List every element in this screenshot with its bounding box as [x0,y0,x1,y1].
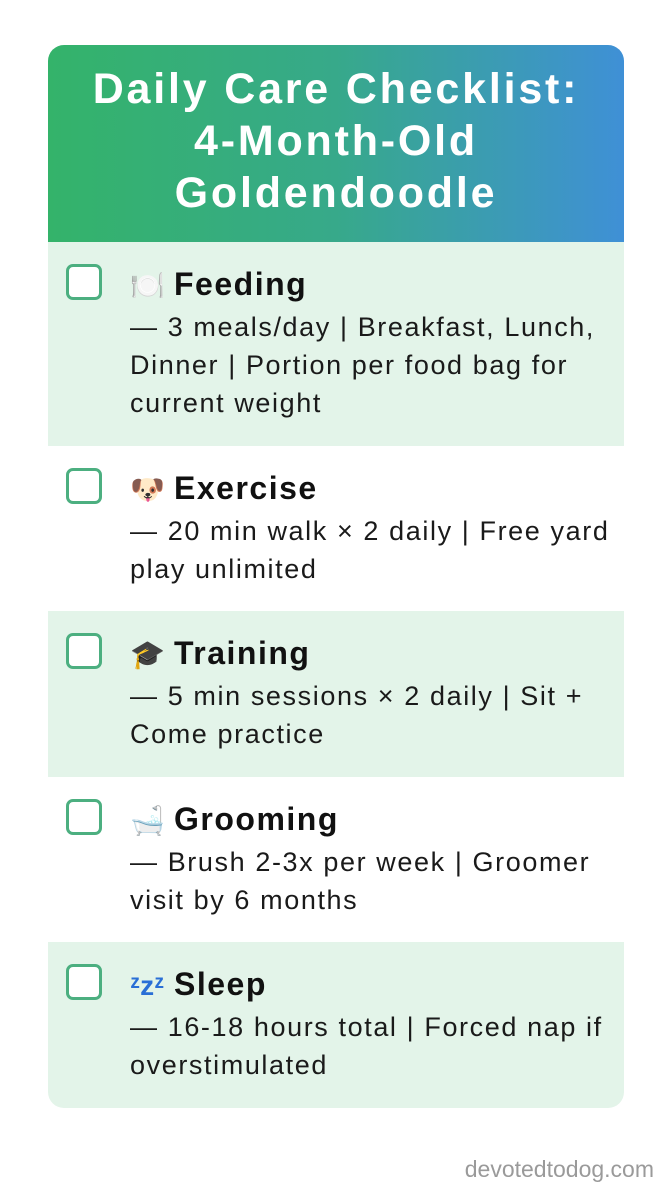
heading: feeding: 🍽️ [130,270,165,301]
heading: grooming: 🛁 [130,805,165,836]
heading: grooming: Grooming [174,801,339,837]
row: exercise [48,446,624,611]
row: sleep [48,942,624,1108]
heading: exercise: Exercise [174,470,318,506]
text: training details: — 5 min sessions × 2 daily | Sit + Come practice [130,681,583,749]
title header: Goldendoodle [175,169,497,217]
row: training [48,611,624,777]
text: sleep details: — 16-18 hours total | Forced nap if overstimulated [130,1012,603,1080]
row: grooming [48,777,624,942]
text: feeding details: — 3 meals/day | Breakfast, Lunch, Dinner | Portion per food bag for current weight [130,312,595,418]
checklist card [48,45,624,1108]
footer url: devotedtodog.com [465,1156,654,1182]
title header: 4-Month-Old [194,117,478,165]
checkbox [66,468,102,504]
checkbox [66,799,102,835]
text: grooming details: — Brush 2-3x per week | Groomer visit by 6 months [130,847,590,915]
heading: feeding: Feeding [174,266,307,302]
heading: exercise: 🐶 [130,474,165,505]
text: exercise details: — 20 min walk × 2 daily | Free yard play unlimited [130,516,609,584]
checkbox [66,633,102,669]
checkbox [66,264,102,300]
heading: sleep: ᶻzᶻ [130,970,164,1001]
row: feeding [48,242,624,446]
heading: training: Training [174,635,310,671]
checkbox [66,964,102,1000]
heading: training: 🎓 [130,639,165,670]
title header: Daily Care Checklist: [93,65,579,113]
heading: sleep: Sleep [174,966,267,1002]
heading: sleep [130,966,267,1002]
title header [48,45,624,242]
